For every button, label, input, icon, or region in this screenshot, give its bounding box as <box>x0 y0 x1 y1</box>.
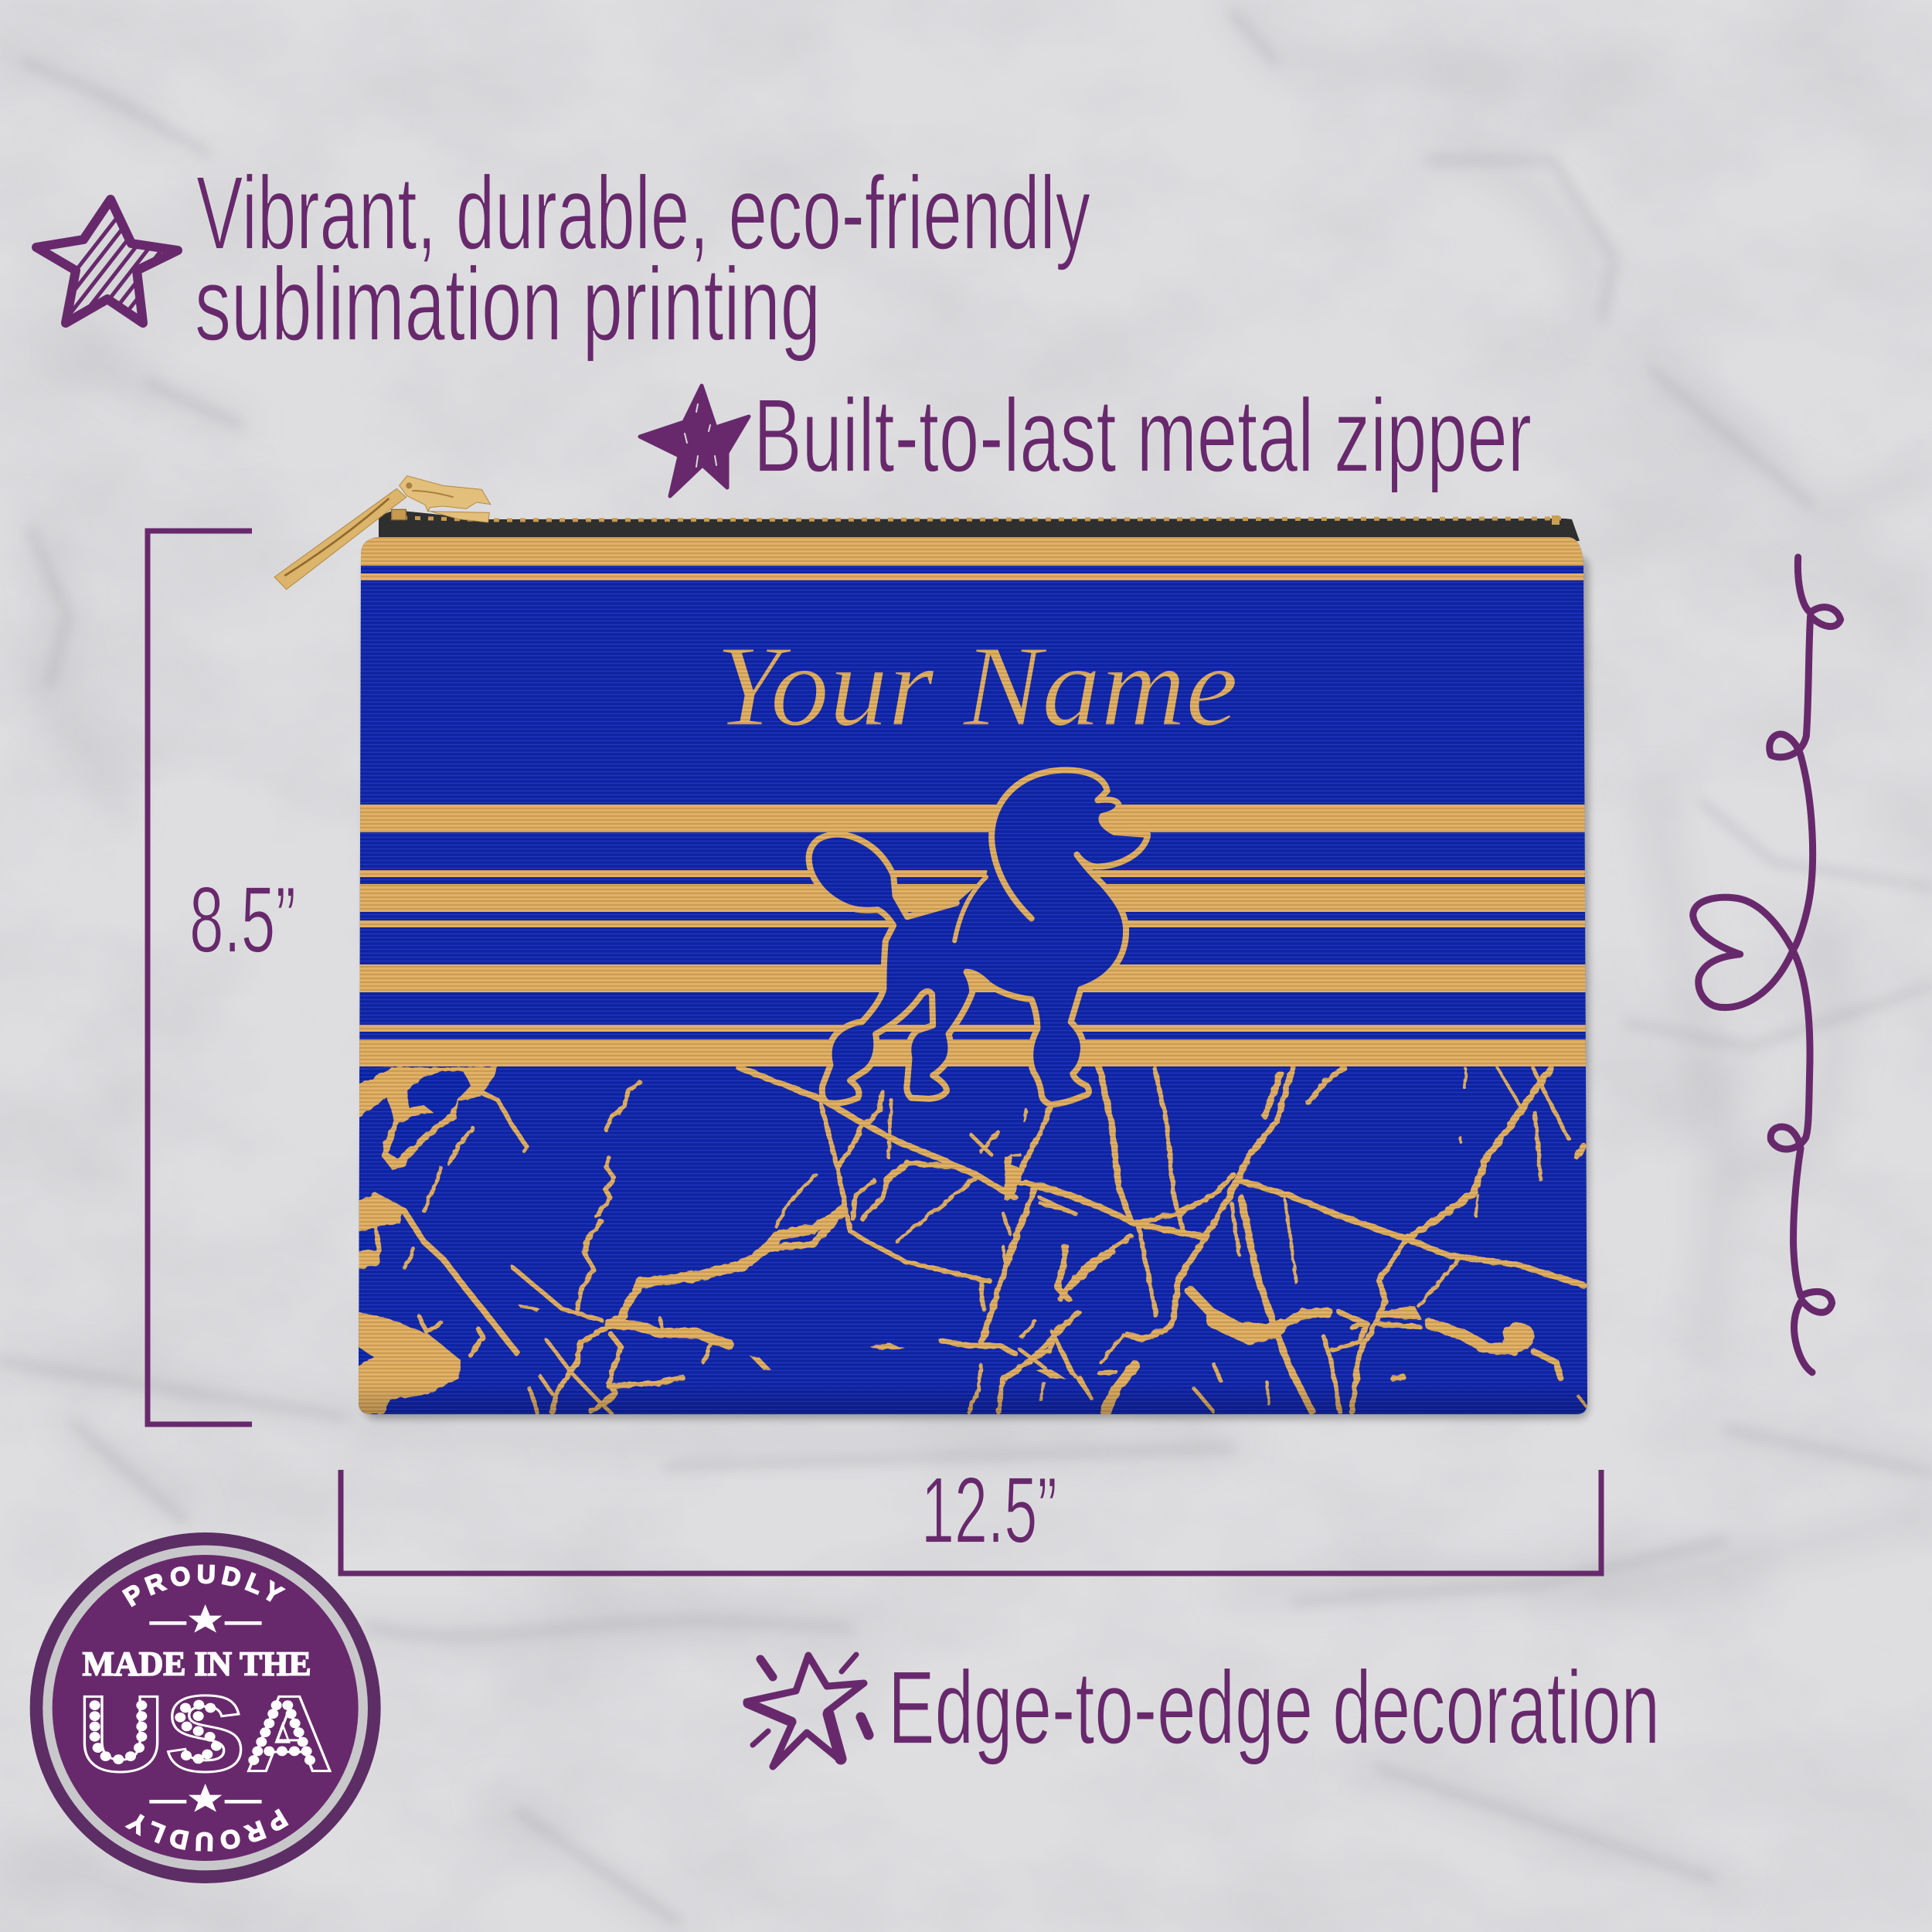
dimension bracket: height <box>148 531 252 1424</box>
badge bottom arc text: PROUDLY <box>124 1808 289 1852</box>
feature text: metal zipper: Built-to-last metal zipper <box>753 377 1532 494</box>
badge rings <box>36 1539 374 1877</box>
gold marble veins <box>355 1066 1587 1414</box>
veins: left half <box>355 1066 1113 1414</box>
icon: sparkle star <box>747 1655 869 1767</box>
fabric weave texture <box>355 533 1592 1418</box>
feature text: sublimation printing: sublimation printing <box>195 246 821 362</box>
dimension label: height: 8.5” <box>189 867 296 972</box>
badge top star divider <box>149 1604 262 1633</box>
feature text: sublimation printing: Vibrant, durable, eco-friendly <box>196 155 1090 271</box>
pouch shadow <box>365 556 1589 1419</box>
pouch fabric <box>355 533 1592 1418</box>
zipper pull <box>274 476 491 590</box>
poodle silhouette <box>809 770 1148 1105</box>
zipper end stop <box>1552 515 1560 525</box>
badge heading: MADE IN THE <box>83 1645 311 1682</box>
badge bottom star divider <box>149 1784 262 1812</box>
marquee USA lettering: USA <box>77 1673 333 1794</box>
feature text: sublimation printing <box>195 155 1090 362</box>
dimension label: width: 12.5” <box>921 1458 1057 1563</box>
icon: solid scribble star <box>640 386 749 496</box>
gold stripes <box>355 537 1592 1066</box>
personalised name: Your Name <box>716 622 1238 750</box>
product: zipper pouch <box>274 476 1592 1419</box>
bottom edge shading <box>355 1383 1592 1416</box>
icon: striped star <box>32 195 182 328</box>
veins: right half <box>1005 1068 1587 1412</box>
zipper teeth <box>402 518 1561 520</box>
badge: proudly made in the USA <box>29 1532 381 1883</box>
decorative squiggle with heart <box>1693 557 1841 1372</box>
dimension bracket: width <box>341 1470 1601 1573</box>
badge top arc text: PROUDLY <box>122 1564 286 1607</box>
zipper tape <box>379 510 1580 541</box>
